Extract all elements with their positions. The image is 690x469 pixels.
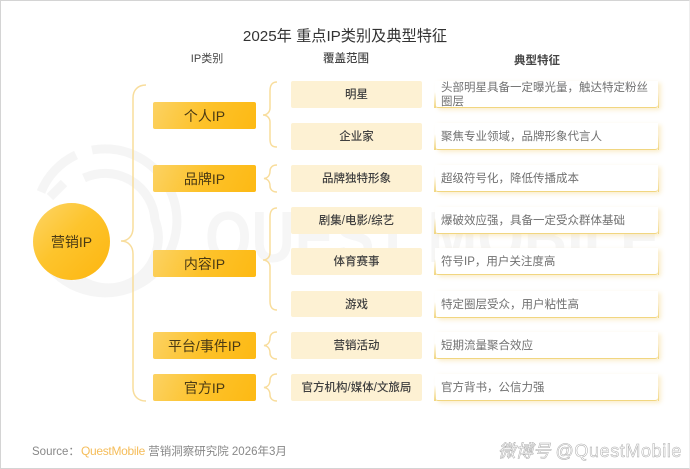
central circle: 营销IP: 营销IP	[51, 234, 92, 250]
scope: 明星: 明星	[345, 89, 368, 101]
scope: 官方机构/媒体/文旅局	[291, 374, 422, 401]
category: 官方IP	[153, 374, 256, 401]
feature: 体育赛事: 符号IP，用户关注度高	[441, 256, 555, 268]
scope: 营销活动	[291, 332, 422, 359]
feature: 体育赛事	[435, 248, 658, 275]
scope: 品牌独特形象: 品牌独特形象	[322, 173, 391, 185]
category: 品牌IP: 品牌IP	[184, 171, 225, 187]
feature: 游戏: 特定圈层受众，用户粘性高	[441, 299, 579, 311]
category: 平台/事件IP: 平台/事件IP	[168, 338, 241, 354]
scope: 游戏: 游戏	[345, 299, 368, 311]
category: 内容IP	[153, 250, 256, 277]
category: 个人IP	[153, 102, 256, 129]
scope: 营销活动: 营销活动	[334, 340, 380, 352]
brace: 官方IP	[264, 374, 277, 401]
scope: 游戏	[291, 291, 422, 317]
column heading: 典型特征: 典型特征	[514, 55, 560, 67]
social watermark: 微博号 @QuestMobile	[498, 441, 682, 461]
feature: 营销活动	[435, 332, 658, 359]
category: 个人IP: 个人IP	[184, 108, 225, 124]
scope: 企业家: 企业家	[339, 131, 374, 143]
feature: 剧集/电影/综艺: 爆破效应强，具备一定受众群体基础	[441, 215, 625, 227]
central circle: 营销IP	[33, 203, 110, 280]
brace: 内容IP	[263, 208, 277, 310]
feature: 企业家: 聚焦专业领域，品牌形象代言人	[441, 131, 602, 143]
source line: Source：QuestMobile 营销洞察研究院 2026年3月	[32, 444, 287, 458]
feature: 官方机构/媒体/文旅局: 官方背书，公信力强	[441, 382, 544, 394]
feature: 游戏	[435, 291, 658, 318]
main brace	[121, 85, 146, 401]
scope: 品牌独特形象	[291, 165, 422, 192]
feature: 明星: 头部明星具备一定曝光量，触达特定粉丝圈层	[441, 82, 648, 108]
scope: 明星	[291, 81, 422, 108]
scope: 剧集/电影/综艺: 剧集/电影/综艺	[319, 215, 394, 227]
brace: 品牌IP	[264, 165, 277, 192]
scope: 体育赛事: 体育赛事	[334, 256, 380, 268]
category: 品牌IP	[153, 165, 256, 192]
brace: 平台/事件IP	[264, 332, 277, 359]
scope: 官方机构/媒体/文旅局: 官方机构/媒体/文旅局	[302, 382, 411, 394]
category: 平台/事件IP	[153, 332, 256, 359]
feature: 营销活动: 短期流量聚合效应	[441, 340, 533, 352]
column heading: 覆盖范围: 覆盖范围	[323, 53, 369, 65]
category: 官方IP: 官方IP	[184, 380, 225, 396]
brace: 个人IP	[263, 82, 277, 147]
scope: 体育赛事	[291, 248, 422, 275]
scope: 企业家	[291, 123, 422, 150]
category: 内容IP: 内容IP	[184, 256, 225, 272]
title: 2025年 重点IP类别及典型特征	[243, 28, 447, 45]
column heading: IP类别: IP类别	[191, 53, 223, 65]
scope: 剧集/电影/综艺	[291, 207, 422, 234]
feature: 官方机构/媒体/文旅局	[435, 374, 658, 401]
feature: 剧集/电影/综艺	[435, 207, 658, 234]
feature: 品牌独特形象	[435, 165, 658, 192]
feature: 企业家	[435, 123, 658, 150]
feature: 品牌独特形象: 超级符号化，降低传播成本	[441, 173, 579, 185]
